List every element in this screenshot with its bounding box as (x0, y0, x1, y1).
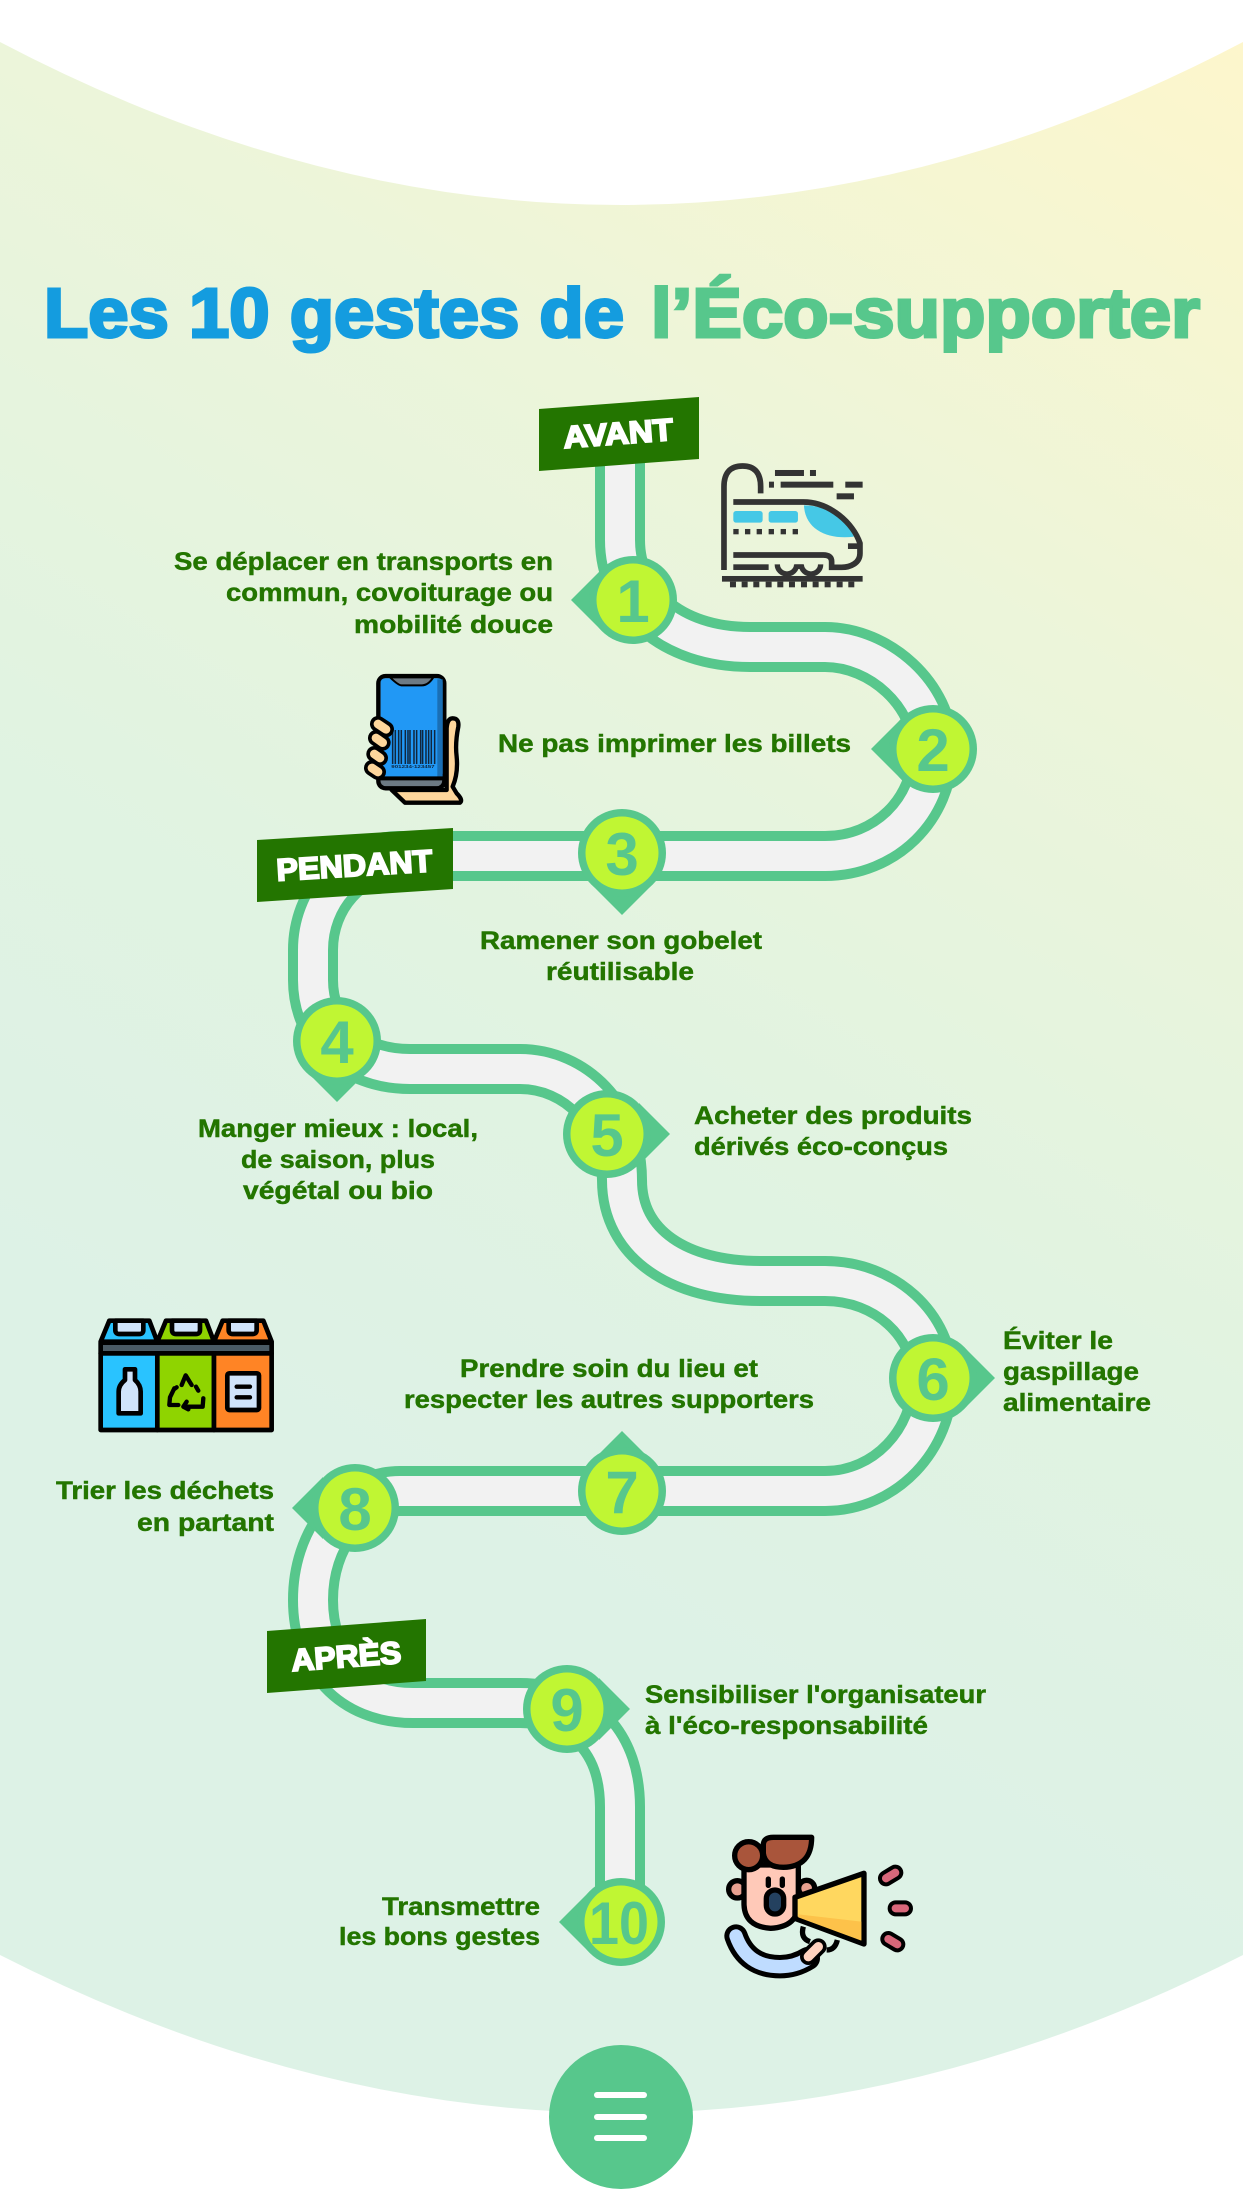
icon: person with megaphone (729, 1837, 905, 1967)
step 4 marker: 4 (320, 1009, 354, 1076)
step 8 marker (292, 1464, 399, 1552)
text: step 6: Éviter le (1003, 1326, 1113, 1355)
step 1 marker: 1 (616, 568, 650, 635)
banner: AVANT (539, 397, 699, 471)
winding road (313, 440, 933, 1922)
step 5 marker (563, 1090, 670, 1178)
text: step 8: Trier les déchets (56, 1477, 274, 1505)
text: step 6 (1003, 1326, 1151, 1417)
step 10 marker: 10 (589, 1890, 649, 1957)
step 2 marker (871, 705, 977, 793)
text: step 1: commun, covoiturage ou (226, 579, 553, 607)
step 6 marker: 6 (916, 1346, 950, 1413)
banner: PENDANT: PENDANT (275, 843, 433, 888)
text: step 10: les bons gestes (339, 1923, 540, 1951)
text: step 3: réutilisable (546, 958, 694, 986)
text: step 7: respecter les autres supporters (404, 1386, 814, 1414)
text: step 1 (174, 548, 553, 639)
icon: recycling bins (101, 1321, 272, 1430)
step 2 marker: 2 (916, 717, 950, 784)
step 3 marker (578, 809, 666, 915)
text: step 6: alimentaire (1003, 1389, 1151, 1417)
banner: PENDANT (257, 828, 453, 902)
title: l’Éco-supporter (651, 274, 1200, 352)
step 1 marker (571, 556, 677, 644)
text: step 9: à l'éco-responsabilité (645, 1712, 928, 1740)
text: step 4: végétal ou bio (243, 1177, 433, 1205)
text: step 9 (645, 1681, 986, 1740)
step 3 marker: 3 (605, 821, 639, 888)
text: step 3 (480, 927, 763, 986)
title: Les 10 gestes de (44, 274, 624, 352)
step 6 marker (889, 1334, 995, 1422)
text: step 5 (694, 1102, 972, 1161)
step 4 marker (293, 997, 381, 1102)
step 9 marker: 9 (550, 1677, 584, 1744)
icon: train (722, 466, 863, 587)
text: step 1: mobilité douce (354, 611, 553, 639)
text: step 6: gaspillage (1003, 1358, 1139, 1386)
text: step 5: Acheter des produits (694, 1102, 972, 1130)
title (44, 274, 1200, 352)
text: step 5: dérivés éco-conçus (694, 1133, 948, 1161)
text: step 7: Prendre soin du lieu et (460, 1355, 759, 1383)
text: step 10: Transmettre (382, 1893, 540, 1921)
text: step 8 (56, 1477, 275, 1537)
banner: APRÈS: APRÈS (290, 1635, 402, 1678)
text: step 8: en partant (137, 1509, 275, 1537)
text: step 1: Se déplacer en transports en (174, 548, 553, 576)
text: step 4 (198, 1115, 478, 1205)
banner: AVANT: AVANT (562, 412, 674, 455)
text: step 7 (404, 1355, 814, 1414)
icon: phone with barcode (372, 676, 461, 803)
step 5 marker: 5 (590, 1102, 624, 1169)
text: step 10 (339, 1893, 540, 1951)
step 7 marker: 7 (605, 1459, 639, 1526)
text: step 9: Sensibiliser l'organisateur (645, 1681, 986, 1709)
step 10 marker (559, 1878, 665, 1966)
icon: phone with barcode: 901234-123457 (391, 764, 435, 769)
step 9 marker (523, 1665, 630, 1753)
banner: APRÈS (267, 1619, 426, 1693)
text: step 3: Ramener son gobelet (480, 927, 763, 955)
menu button (549, 2045, 693, 2189)
step 7 marker (578, 1431, 666, 1535)
text: step 4: Manger mieux : local, (198, 1115, 478, 1143)
step 8 marker: 8 (338, 1476, 372, 1543)
text: step 2: Ne pas imprimer les billets (498, 730, 851, 758)
text: step 4: de saison, plus (241, 1146, 435, 1174)
